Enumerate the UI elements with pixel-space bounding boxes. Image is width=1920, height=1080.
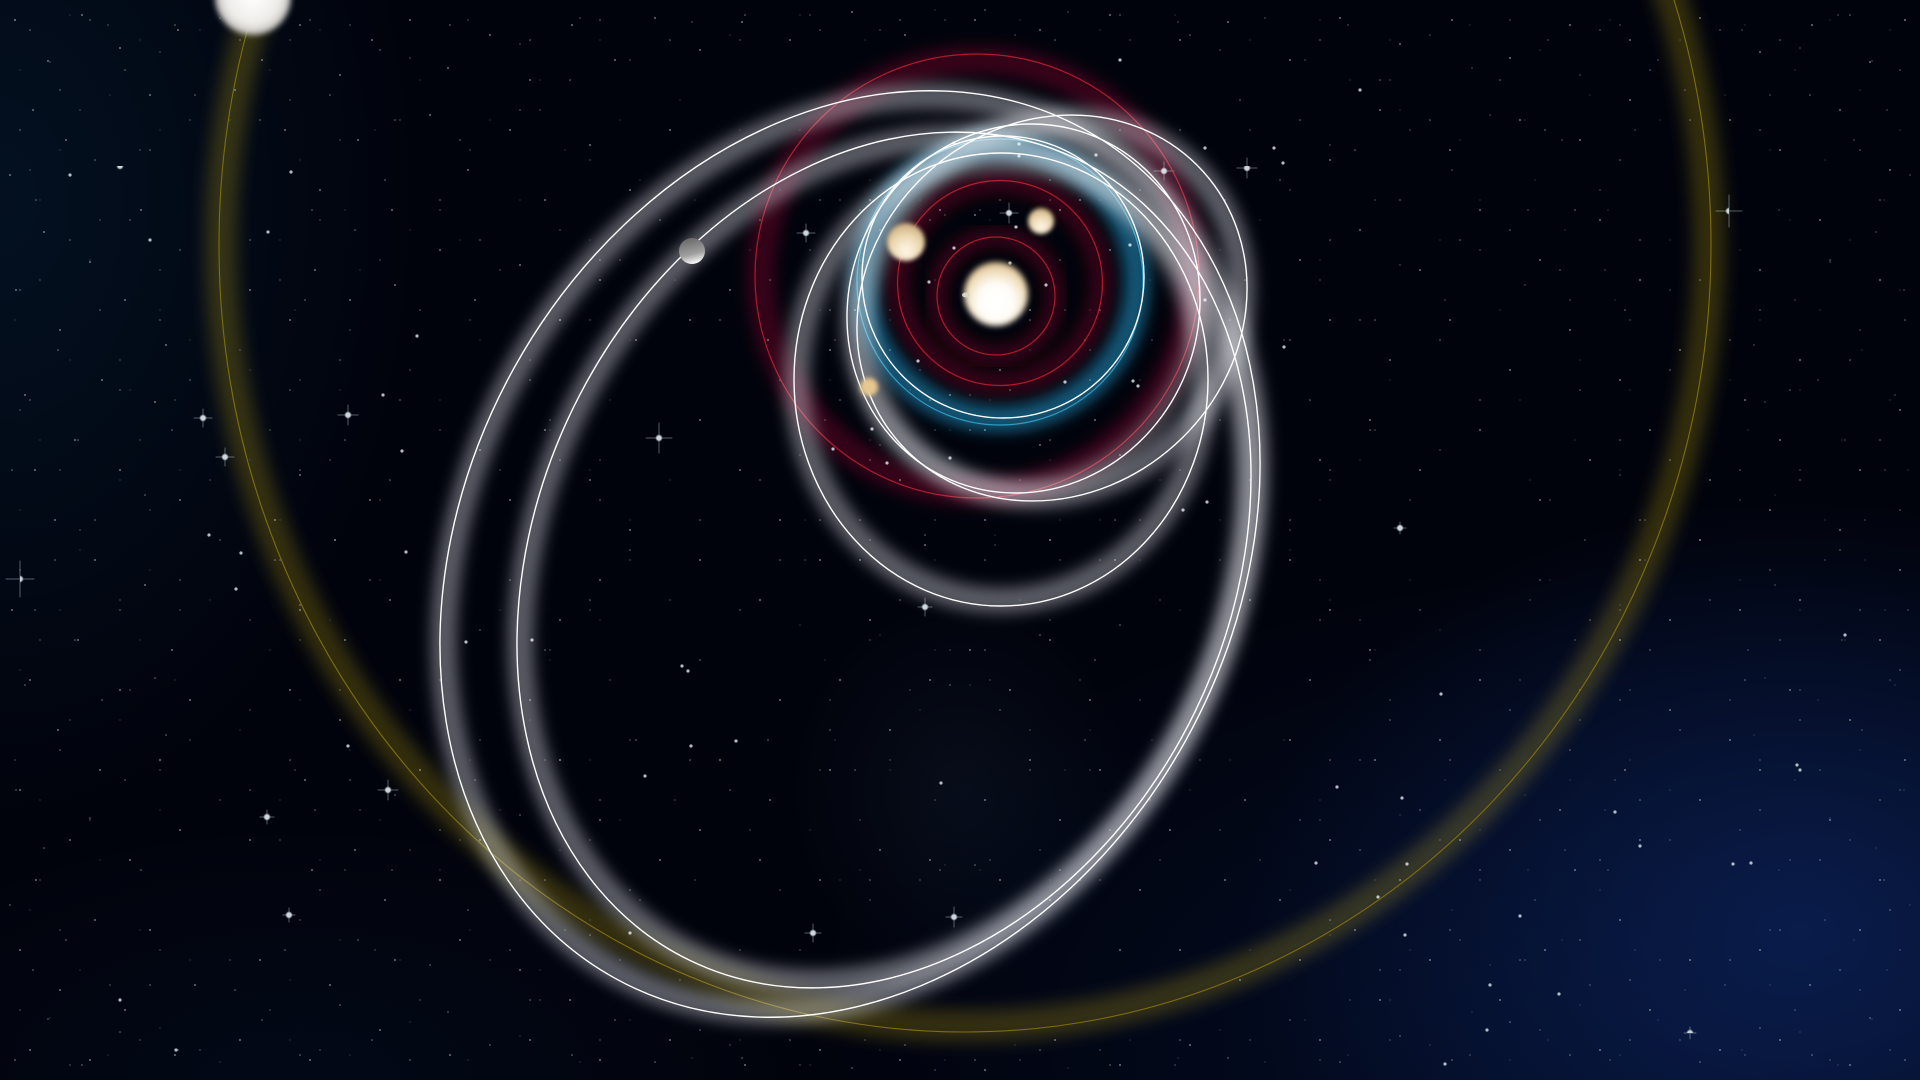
orbit: second red ring bbox=[898, 180, 1102, 386]
orbit: large red ring bbox=[755, 54, 1199, 498]
orbit: inner red ring bbox=[937, 237, 1055, 355]
planet: sun bbox=[964, 262, 1028, 326]
orbit: outer gas giant (yellow) bbox=[219, 0, 1711, 1032]
planet: small tan planet bbox=[1028, 208, 1054, 234]
orbit: blue ring bbox=[857, 139, 1143, 425]
planet: grey asteroid bbox=[679, 238, 705, 264]
planet: large white giant at top bbox=[215, 0, 291, 35]
orbit: white comet ellipse C bbox=[778, 35, 1326, 581]
orbit: white comet ring A bbox=[862, 136, 1144, 418]
planet: small amber planet bbox=[860, 378, 878, 396]
orbit: long comet ellipse L2 bbox=[378, 9, 1390, 1080]
orbit: long comet ellipse L1 bbox=[279, 0, 1421, 1080]
planet: mercury-size body near sun bbox=[962, 292, 970, 298]
planet: large tan planet bbox=[887, 223, 925, 261]
orbit: white comet ellipse E1 bbox=[794, 153, 1208, 606]
orbit: white comet ellipse B bbox=[790, 69, 1257, 548]
